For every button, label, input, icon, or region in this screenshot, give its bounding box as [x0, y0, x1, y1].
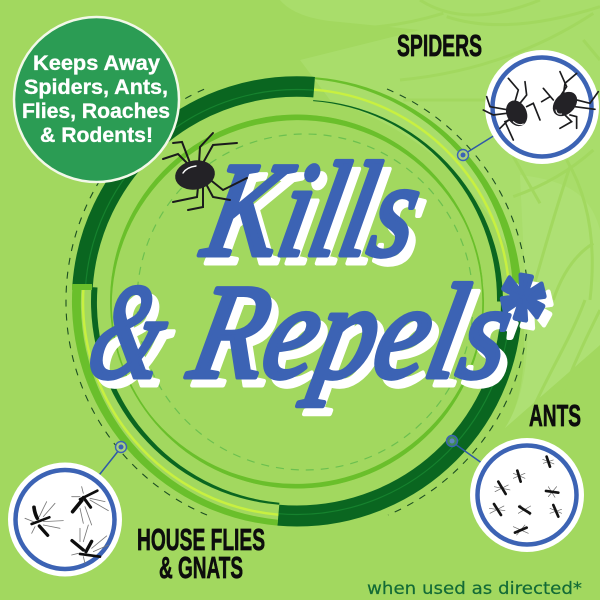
target marker — [116, 442, 126, 452]
title text — [78, 134, 545, 407]
title shadow — [85, 142, 552, 415]
dark ring segment upper left — [68, 72, 526, 531]
title text: * — [494, 250, 545, 377]
label: spiders: SPIDERS — [397, 28, 482, 63]
title shadow: Repels — [186, 264, 533, 415]
title text: Repels — [179, 256, 526, 407]
icon: ants — [489, 457, 562, 535]
callout: spiders — [458, 50, 599, 164]
footnote: when used as directed* — [367, 579, 582, 599]
label: house flies & gnats: HOUSE FLIES — [137, 522, 265, 557]
title shadow: * — [501, 258, 552, 385]
callout: ants — [446, 436, 584, 552]
badge: keeps away: & Rodents! — [40, 124, 153, 147]
label: house flies & gnats: & GNATS — [159, 550, 243, 585]
background leaf pattern — [280, 0, 600, 428]
title: Kills & Repels — [78, 134, 552, 415]
callout: house flies — [8, 442, 126, 576]
title text: Kills — [192, 134, 434, 285]
badge: keeps away: Keeps Away — [33, 52, 160, 75]
light ring segment lower left — [65, 70, 529, 533]
label: house flies & gnats — [137, 522, 265, 585]
icon: flies — [25, 487, 108, 563]
inner dashed ring — [137, 134, 473, 470]
title shadow: & — [85, 264, 189, 415]
circle frame — [485, 50, 599, 164]
icon: two spiders — [483, 72, 598, 140]
circle frame — [470, 438, 584, 552]
outer dashed ring — [66, 88, 528, 515]
connector line — [455, 444, 486, 466]
title text: & — [78, 256, 182, 407]
badge: keeps away: Spiders, Ants, — [24, 76, 168, 99]
inner solid ring — [110, 115, 484, 489]
target marker — [458, 150, 468, 160]
title shadow: Kills — [199, 142, 441, 293]
badge: keeps away — [14, 17, 179, 182]
target marker — [446, 436, 458, 446]
light ring segment upper right — [68, 73, 526, 530]
circle frame — [8, 462, 122, 576]
badge: keeps away: Flies, Roaches — [22, 100, 170, 123]
connector line — [466, 135, 495, 153]
connector line — [96, 450, 119, 479]
icon: large spider — [163, 133, 247, 210]
dark ring segment lower right — [82, 87, 512, 516]
concentric ring graphic — [65, 70, 529, 533]
